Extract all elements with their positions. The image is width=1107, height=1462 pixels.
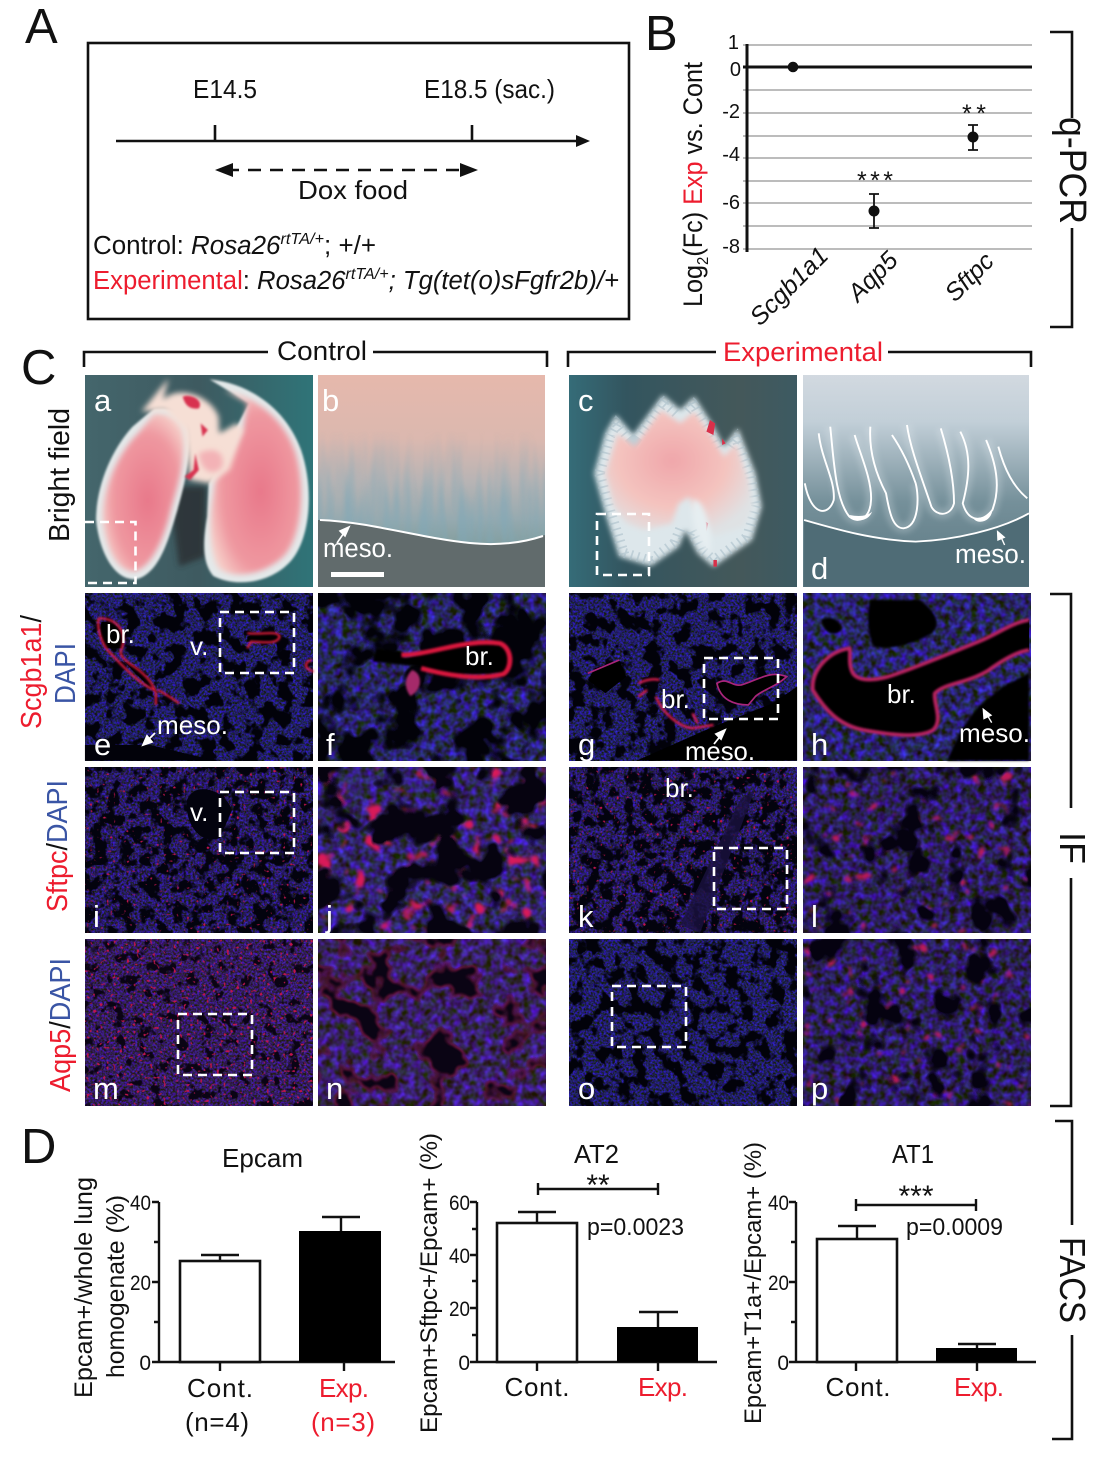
y ticks: 0 bbox=[458, 1352, 470, 1375]
significance bracket: *** bbox=[898, 1180, 934, 1213]
dashed inset box i bbox=[220, 792, 294, 853]
label n: n bbox=[326, 1071, 343, 1106]
row label Scgb1a1 DAPI: Scgb1a1/ bbox=[16, 614, 48, 729]
label j: j bbox=[325, 899, 333, 934]
y axis title: Log bbox=[678, 262, 708, 307]
title AT1: AT1 bbox=[892, 1139, 934, 1169]
label p: p bbox=[811, 1071, 828, 1106]
row label Scgb1a1 DAPI bbox=[16, 614, 82, 729]
labels e: br. bbox=[106, 619, 135, 649]
panel A: experimental timeline bbox=[88, 43, 629, 319]
airway band bbox=[680, 790, 755, 933]
y axis title: homogenate (%) bbox=[102, 1195, 130, 1378]
q-PCR side bracket: q-PCR bbox=[1051, 117, 1093, 224]
panel n: Aqp5 high mag control bbox=[318, 939, 546, 1106]
alveolar halos bbox=[830, 425, 997, 528]
y tick labels bbox=[722, 32, 741, 258]
label d: d bbox=[811, 551, 828, 586]
y tick labels: -4 bbox=[722, 144, 740, 166]
significance bracket bbox=[538, 1169, 658, 1202]
label g: g bbox=[578, 727, 595, 762]
data points bbox=[788, 62, 978, 228]
y tick labels: 0 bbox=[730, 59, 741, 81]
x labels bbox=[185, 1373, 375, 1437]
scale bar bbox=[331, 572, 384, 577]
labels g: br. bbox=[661, 684, 690, 714]
panel label C: C bbox=[21, 341, 56, 395]
y tick labels: -8 bbox=[722, 236, 740, 258]
panel B: q-PCR dot plot bbox=[678, 32, 1032, 331]
y ticks: 0 bbox=[777, 1352, 789, 1375]
dashed inset box e bbox=[220, 612, 294, 673]
panel a: control lung bbox=[85, 375, 313, 587]
E18.5 label: E18.5 (sac.) bbox=[424, 74, 555, 104]
labels h: br. bbox=[887, 679, 916, 709]
y ticks: 40 bbox=[130, 1192, 151, 1215]
FACS side bracket: FACS bbox=[1052, 1237, 1093, 1323]
y tick labels: -2 bbox=[722, 101, 740, 123]
y axis title: Exp vs. Cont bbox=[678, 55, 708, 205]
dashed dox arrow bbox=[215, 163, 478, 177]
label m: m bbox=[93, 1071, 119, 1106]
y tick labels: -6 bbox=[722, 192, 740, 214]
x category labels bbox=[744, 242, 1000, 331]
grid lines bbox=[743, 45, 1032, 249]
y axis title: Epcam+T1a+/Epcam+ (%) bbox=[740, 1142, 767, 1424]
x category labels: Scgb1a1 bbox=[744, 242, 834, 331]
panel k: Sftpc low mag experimental bbox=[569, 767, 797, 934]
dashed inset box c bbox=[597, 514, 649, 575]
vessel lumen bbox=[187, 789, 232, 839]
labels h bbox=[887, 679, 1030, 748]
experimental bracket bbox=[568, 337, 1031, 367]
IF side bracket bbox=[1050, 594, 1093, 1106]
control genotype: ; +/+ bbox=[324, 232, 376, 260]
row label Sftpc DAPI: Sftpc/DAPI bbox=[42, 780, 74, 912]
E14.5 label: E14.5 bbox=[193, 74, 257, 104]
significance bracket: ** bbox=[586, 1169, 610, 1202]
panel d: experimental zoom bbox=[803, 375, 1029, 587]
meso arrow bbox=[337, 527, 349, 543]
panel label B: B bbox=[645, 7, 678, 61]
q-PCR side bracket bbox=[1050, 32, 1093, 327]
panel g: Scgb1a1 low mag experimental bbox=[569, 593, 797, 766]
label l: l bbox=[811, 899, 818, 934]
row label bright field: Bright field bbox=[44, 408, 76, 542]
labels e: v. bbox=[190, 631, 208, 661]
experimental bracket: Experimental bbox=[723, 337, 883, 367]
dashed inset box o bbox=[612, 986, 686, 1047]
title Epcam: Epcam bbox=[222, 1143, 303, 1173]
label h: h bbox=[811, 727, 828, 762]
y ticks: 20 bbox=[449, 1298, 470, 1321]
y ticks bbox=[130, 1192, 151, 1375]
experimental genotype: rtTA/+ bbox=[346, 266, 389, 283]
meso label b: meso. bbox=[323, 535, 393, 563]
label c: c bbox=[578, 383, 594, 418]
meso arrow e bbox=[143, 733, 155, 745]
row label Scgb1a1 DAPI: DAPI bbox=[50, 643, 82, 704]
y ticks: 0 bbox=[139, 1352, 151, 1375]
meso label d: meso. bbox=[955, 541, 1026, 569]
axes bbox=[743, 44, 1032, 252]
labels g: meso. bbox=[685, 736, 755, 766]
p value: p=0.0023 bbox=[587, 1214, 684, 1241]
label b: b bbox=[322, 383, 339, 418]
chart: AT2 bbox=[416, 1133, 717, 1433]
IF side bracket: IF bbox=[1052, 832, 1093, 864]
p value: p=0.0009 bbox=[906, 1214, 1003, 1241]
bars bbox=[817, 1226, 1017, 1362]
x labels: Cont. bbox=[504, 1372, 570, 1402]
y axis title bbox=[70, 1177, 130, 1398]
timeline arrow bbox=[116, 125, 590, 147]
Dox food label: Dox food bbox=[298, 175, 408, 205]
y tick labels: 1 bbox=[728, 32, 739, 54]
label e: e bbox=[94, 727, 111, 762]
x labels bbox=[504, 1372, 688, 1402]
axes bbox=[789, 1202, 1036, 1371]
significance stars: ** bbox=[962, 100, 986, 128]
x labels: Exp. bbox=[954, 1372, 1004, 1402]
chart: Epcam bbox=[70, 1143, 395, 1437]
significance stars: *** bbox=[857, 167, 893, 195]
labels e bbox=[106, 619, 228, 740]
label a: a bbox=[94, 383, 112, 418]
panel j: Sftpc high mag control bbox=[318, 767, 546, 934]
significance bracket bbox=[856, 1180, 976, 1213]
panel f: Scgb1a1 high mag control bbox=[318, 593, 546, 762]
dashed inset box a bbox=[85, 522, 136, 583]
panel l: Sftpc high mag experimental bbox=[803, 767, 1031, 934]
panel b: control zoom bbox=[318, 375, 545, 587]
x category labels: Sftpc bbox=[939, 247, 1000, 307]
x labels: Cont. bbox=[187, 1373, 253, 1403]
title AT2: AT2 bbox=[574, 1139, 619, 1169]
bars bbox=[497, 1212, 698, 1362]
label v: v. bbox=[190, 797, 208, 827]
x labels: Cont. bbox=[826, 1372, 890, 1402]
dashed inset box k bbox=[714, 848, 787, 909]
meso arrow d bbox=[998, 532, 1005, 545]
labels g bbox=[661, 684, 755, 766]
control genotype: Control: Rosa26 bbox=[93, 232, 279, 260]
panel c: experimental lung bbox=[569, 375, 797, 587]
y axis title: Epcam+Sftpc+/Epcam+ (%) bbox=[416, 1133, 443, 1433]
panel m: Aqp5 low mag control bbox=[85, 939, 313, 1106]
row label Aqp5 DAPI: Aqp5/DAPI bbox=[45, 958, 77, 1092]
panel p: Aqp5 high mag experimental bbox=[803, 939, 1031, 1106]
chart: AT1 bbox=[740, 1139, 1036, 1424]
label k: k bbox=[578, 899, 594, 934]
axes bbox=[470, 1202, 717, 1371]
axes bbox=[152, 1202, 395, 1371]
y ticks: 40 bbox=[449, 1245, 470, 1268]
panel h: Scgb1a1 high mag experimental bbox=[803, 593, 1031, 762]
dashed inset box m bbox=[178, 1014, 252, 1075]
FACS side bracket bbox=[1052, 1121, 1093, 1439]
panel e: Scgb1a1 low mag control bbox=[85, 593, 314, 762]
label br f: br. bbox=[465, 641, 494, 671]
panel label A: A bbox=[25, 0, 58, 54]
x labels: (n=4) bbox=[185, 1407, 249, 1437]
labels h: meso. bbox=[959, 718, 1030, 748]
x labels: (n=3) bbox=[311, 1407, 375, 1437]
meso arrow h bbox=[983, 709, 992, 723]
alveolar outlines bbox=[804, 425, 1029, 542]
dashed inset box g bbox=[704, 658, 778, 719]
label f: f bbox=[326, 727, 335, 762]
experimental genotype: Experimental: Rosa26 bbox=[93, 267, 345, 295]
label o: o bbox=[578, 1071, 595, 1106]
label i: i bbox=[93, 899, 100, 934]
timeline frame bbox=[88, 43, 629, 319]
x labels bbox=[826, 1372, 1004, 1402]
x labels: Exp. bbox=[319, 1373, 369, 1403]
y ticks: 20 bbox=[768, 1272, 789, 1295]
x category labels: Aqp5 bbox=[841, 246, 904, 309]
panel label D: D bbox=[21, 1120, 56, 1174]
labels e: meso. bbox=[157, 710, 228, 740]
y ticks: 60 bbox=[449, 1192, 470, 1215]
label br k: br. bbox=[665, 773, 694, 803]
y ticks: 20 bbox=[130, 1272, 151, 1295]
panel o: Aqp5 low mag experimental bbox=[569, 939, 797, 1106]
y ticks bbox=[449, 1192, 470, 1375]
y axis title: Epcam+/whole lung bbox=[70, 1177, 98, 1398]
y axis title: 2 bbox=[695, 257, 712, 265]
mesothelium line bbox=[320, 520, 543, 544]
control genotype: rtTA/+ bbox=[280, 231, 324, 248]
y ticks: 40 bbox=[768, 1192, 789, 1215]
y axis title: (Fc) bbox=[678, 205, 708, 257]
bars bbox=[180, 1217, 381, 1362]
control bracket bbox=[84, 336, 547, 367]
significance stars bbox=[857, 100, 986, 195]
x labels: Exp. bbox=[638, 1372, 688, 1402]
panel i: Sftpc low mag control bbox=[85, 767, 313, 934]
meso arrow g bbox=[714, 730, 725, 744]
control bracket: Control bbox=[277, 336, 367, 366]
experimental genotype: ; Tg(tet(o)sFgfr2b)/+ bbox=[389, 267, 619, 295]
y ticks bbox=[768, 1192, 789, 1375]
